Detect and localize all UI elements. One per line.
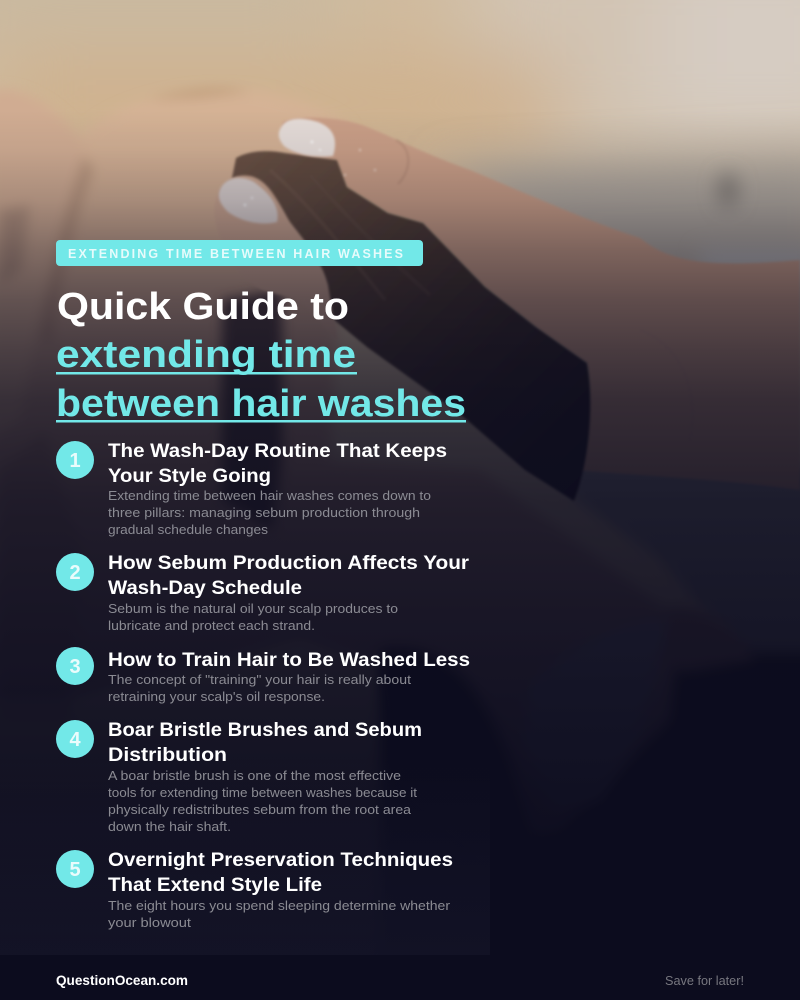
item 2 heading: How Sebum Production Affects Your bbox=[108, 553, 470, 574]
footer site name: QuestionOcean.com bbox=[56, 972, 188, 988]
title: Quick Guide to bbox=[57, 286, 349, 328]
number badge 4 bbox=[56, 720, 94, 758]
footer save note: Save for later! bbox=[665, 973, 744, 988]
number badge 1 bbox=[56, 441, 94, 479]
item 4 description: down the hair shaft. bbox=[108, 819, 231, 834]
item 5 heading: That Extend Style Life bbox=[108, 875, 322, 896]
pillow lower right bbox=[380, 460, 800, 1000]
item 1 description: gradual schedule changes bbox=[108, 522, 269, 537]
number badge 3: 3 bbox=[69, 656, 81, 678]
number badge 5: 5 bbox=[69, 859, 81, 881]
item 3 bbox=[56, 647, 470, 704]
item 2 description: Sebum is the natural oil your scalp produces to bbox=[108, 601, 398, 616]
item 4 description: A boar bristle brush is one of the most effective bbox=[108, 768, 401, 783]
item 5 description bbox=[108, 898, 451, 930]
category badge bbox=[56, 240, 423, 266]
item 1 bbox=[56, 441, 447, 537]
item 3 description: retraining your scalp's oil response. bbox=[108, 689, 325, 704]
item 3 description bbox=[108, 672, 411, 704]
item 4 heading bbox=[108, 720, 422, 766]
item 4 description: tools for extending time between washes because it bbox=[108, 785, 417, 800]
item 4 heading: Distribution bbox=[108, 745, 227, 766]
number badge 4: 4 bbox=[69, 729, 81, 751]
fingernails bbox=[219, 119, 376, 224]
left text panel tint bbox=[0, 760, 490, 955]
item 5 description: The eight hours you spend sleeping determine whether bbox=[108, 898, 451, 913]
item 5 description: your blowout bbox=[108, 915, 191, 930]
item 4 bbox=[56, 720, 422, 834]
head skin left bbox=[0, 88, 680, 840]
fabric on wrist bbox=[525, 608, 755, 810]
number badge 5 bbox=[56, 850, 94, 888]
item 1 description bbox=[108, 488, 431, 537]
finger shadow under badge bbox=[222, 290, 540, 860]
item 2 description bbox=[108, 601, 398, 633]
item 2 description: lubricate and protect each strand. bbox=[108, 618, 315, 633]
title bbox=[56, 286, 466, 425]
item 5 heading bbox=[108, 850, 453, 896]
item 1 heading bbox=[108, 441, 447, 487]
item 4 heading: Boar Bristle Brushes and Sebum bbox=[108, 720, 422, 741]
item 4 description bbox=[108, 768, 417, 834]
item 1 description: Extending time between hair washes comes down to bbox=[108, 488, 431, 503]
item 3 description: The concept of "training" your hair is really about bbox=[108, 672, 411, 687]
item 2 heading: Wash-Day Schedule bbox=[108, 578, 302, 599]
category badge: EXTENDING TIME BETWEEN HAIR WASHES bbox=[68, 247, 403, 261]
hand and thumb bbox=[281, 118, 800, 490]
item 2 heading bbox=[108, 553, 470, 599]
number badge 2 bbox=[56, 553, 94, 591]
item 5 bbox=[56, 850, 453, 930]
item 5 heading: Overnight Preservation Techniques bbox=[108, 850, 453, 871]
item 1 description: three pillars: managing sebum production through bbox=[108, 505, 420, 520]
footer bar bbox=[0, 955, 800, 1000]
item 4 description: physically redistributes sebum from the root area bbox=[108, 802, 412, 817]
item 1 heading: Your Style Going bbox=[108, 466, 271, 487]
item 1 heading: The Wash-Day Routine That Keeps bbox=[108, 441, 447, 462]
number badge 1: 1 bbox=[69, 450, 81, 472]
hair bundle bbox=[232, 151, 590, 501]
title: between hair washes bbox=[56, 383, 466, 425]
number badge 3 bbox=[56, 647, 94, 685]
index finger bbox=[214, 175, 337, 340]
item 3 heading: How to Train Hair to Be Washed Less bbox=[108, 650, 470, 671]
item 2 bbox=[56, 553, 470, 633]
number badge 2: 2 bbox=[69, 562, 81, 584]
title: extending time bbox=[56, 334, 356, 376]
